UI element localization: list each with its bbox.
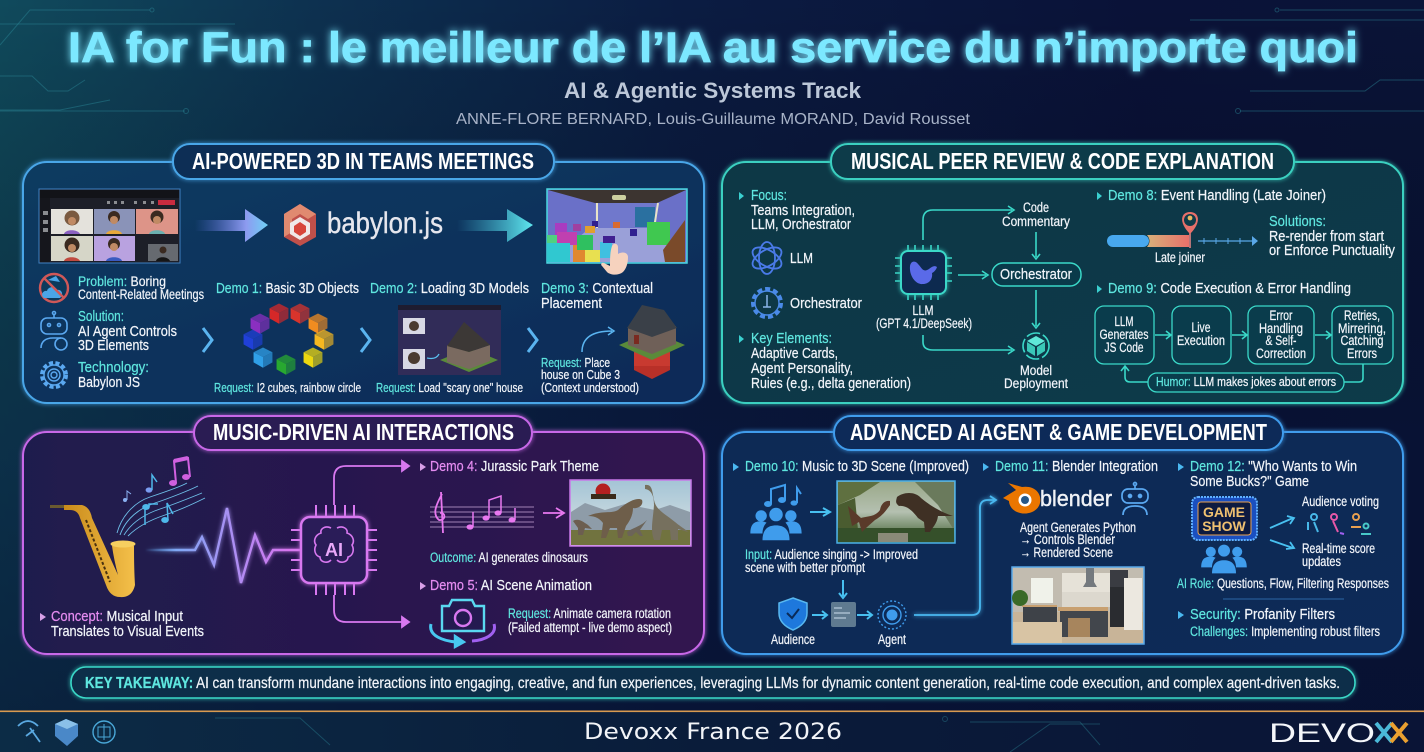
demo 5 request: Request: Animate camera rotation: [508, 606, 671, 621]
flow box: error handling: & Self-: [1266, 333, 1296, 348]
orchestrator pill: [992, 263, 1081, 286]
panel: AI-powered 3D in Teams meetings: [23, 144, 704, 403]
subtitle: track: AI & Agentic Systems Track: [564, 78, 862, 103]
solutions: Re-render from start: [1269, 229, 1384, 245]
Devoxx logo: DEVO: [1269, 718, 1375, 748]
flow box: LLM generates: [1095, 306, 1154, 364]
icon: pointing hand: [601, 244, 628, 275]
code commentary: Commentary: [1002, 214, 1070, 229]
jurassic park image: [570, 480, 691, 546]
orchestrator pill: Orchestrator: [1000, 267, 1072, 283]
flow box: error handling: Correction: [1256, 346, 1306, 361]
focus text: Focus:: [751, 188, 787, 204]
problem text: Content-Related Meetings: [78, 286, 204, 302]
music notes: [117, 458, 205, 536]
focus text: Teams Integration,: [751, 203, 855, 219]
flow box: error handling: Handling: [1259, 321, 1303, 336]
heading pill: MUSIC-DRIVEN AI INTERACTIONS: [213, 419, 514, 445]
demo 1 request: Request: I2 cubes, rainbow circle: [214, 380, 361, 395]
flow box: retries: Mirrering,: [1338, 321, 1386, 336]
demo 2 request: Request: Load "scary one" house: [376, 380, 523, 395]
icon: rotating camera: [431, 600, 494, 647]
model deployment: Model: [1020, 363, 1052, 378]
security: Challenges: Implementing robust filters: [1190, 624, 1380, 639]
AI chip: [291, 505, 377, 595]
demo 3 request: house on Cube 3: [541, 367, 620, 382]
icon: robot: [1122, 482, 1148, 515]
key takeaway banner: [71, 667, 1355, 698]
timeline: late joiner: [1107, 212, 1258, 248]
demo 12 heading: [1178, 459, 1357, 490]
heading pill: [194, 416, 532, 450]
saxophone: [50, 505, 136, 597]
solution text: AI Agent Controls: [78, 324, 177, 340]
icon: agent: [878, 601, 906, 629]
game show sign: GAME: [1203, 504, 1245, 520]
panel: musical peer review: [722, 144, 1403, 403]
small arrows: [812, 611, 872, 619]
humor pill: [1148, 373, 1344, 392]
icon: singing audience: [750, 485, 802, 540]
icon: shield: [779, 598, 807, 630]
concept: Concept: Musical Input: [51, 609, 183, 625]
late joiner label: Late joiner: [1155, 250, 1205, 265]
security: [1178, 607, 1380, 639]
title: IA for Fun : le meilleur de l’IA au service du n’importe quoi: [68, 24, 1358, 72]
LLM chip: [895, 245, 952, 300]
demo 3 request: (Context understood): [541, 380, 639, 395]
AI chip: AI: [325, 540, 343, 560]
labels: Agent: [878, 632, 906, 647]
agent generates: → Controls Blender: [1020, 532, 1115, 547]
house on cube: [619, 305, 685, 379]
demo 3 heading: Demo 3: Contextual: [541, 281, 653, 297]
code commentary: Code: [1023, 200, 1049, 215]
solutions: Solutions:: [1269, 214, 1326, 230]
icon: model cube: [1023, 333, 1049, 359]
model loader screenshot: [398, 305, 501, 375]
arrows: [1270, 516, 1294, 549]
demo 5 request: (Failed attempt - live demo aspect): [508, 620, 672, 635]
demo 1 heading: Demo 1: Basic 3D Objects: [216, 281, 359, 297]
icon: no boring meetings: [40, 274, 68, 302]
dino forest image: [837, 481, 955, 543]
game show sign: [1192, 497, 1257, 540]
input text: scene with better prompt: [745, 560, 865, 575]
flow box: retries: Retries,: [1344, 308, 1380, 323]
icon: voters: [1308, 514, 1371, 534]
LLM caption: (GPT 4.1/DeepSeek): [876, 316, 972, 331]
rainbow cube ring: [244, 304, 333, 375]
speakers: ANNE-FLORE BERNARD, Louis-Guillaume MORAND, David Rousset: [456, 111, 971, 128]
flow box: retries: Catching: [1340, 333, 1384, 348]
LLM caption: LLM: [912, 303, 934, 318]
key elements text: Adaptive Cards,: [751, 346, 838, 362]
arrow to scene: [810, 508, 830, 516]
key elements text: Agent Personality,: [751, 361, 853, 377]
audience voting: Audience voting: [1302, 494, 1379, 509]
agent generates: → Rendered Scene: [1020, 545, 1113, 560]
heading pill: [173, 144, 554, 179]
flow box: live execution: [1172, 306, 1231, 364]
demo 8 heading: Demo 8: Event Handling (Late Joiner): [1108, 188, 1326, 204]
concept: Translates to Visual Events: [51, 624, 204, 640]
prompt chip: [831, 602, 856, 627]
concept: [40, 609, 204, 640]
flow box: LLM generates: Generates: [1100, 327, 1149, 342]
demo 5 heading: Demo 5: AI Scene Animation: [430, 578, 592, 594]
LLM caption: [876, 303, 972, 331]
babylon.js logo: [284, 204, 443, 246]
heading pill: ADVANCED AI AGENT & GAME DEVELOPMENT: [850, 419, 1267, 445]
arrow to babylon: [195, 209, 268, 242]
solutions: [1269, 214, 1396, 259]
music staff: [430, 492, 564, 533]
agent generates: [1020, 520, 1136, 560]
heading pill: [834, 416, 1283, 450]
icon: gear: [42, 363, 66, 387]
problem text: [78, 273, 204, 302]
footer icons: [18, 719, 115, 746]
input text: [745, 547, 918, 575]
panel: music-driven AI interactions: [23, 416, 704, 654]
flow box: retries: Errors: [1347, 346, 1377, 361]
flow box: LLM generates: JS Code: [1104, 340, 1144, 355]
flow box arrows: [1121, 331, 1363, 382]
heading pill: [831, 144, 1294, 179]
demo 2 heading: Demo 2: Loading 3D Models: [370, 281, 529, 297]
babylon.js logo: babylon.js: [327, 207, 443, 240]
curved arrow: [582, 327, 614, 352]
flow box: live execution: Execution: [1177, 333, 1225, 348]
arrow to 3D scene: [457, 209, 533, 242]
orchestrator label: Orchestrator: [790, 296, 862, 312]
solutions: or Enforce Punctuality: [1269, 243, 1396, 259]
3D room screenshot: [547, 189, 687, 263]
icon: orchestrator gear: [753, 289, 781, 317]
heading pill: MUSICAL PEER REVIEW & CODE EXPLANATION: [851, 148, 1274, 174]
real-time score: [1302, 541, 1375, 569]
key elements text: Key Elements:: [751, 331, 832, 347]
flow arrows: [923, 206, 1040, 354]
arrow down: [839, 580, 847, 598]
Devoxx logo: [1269, 718, 1407, 748]
outcome: Outcome: AI generates dinosaurs: [430, 550, 588, 565]
key elements text: [739, 331, 911, 392]
solution text: 3D Elements: [78, 338, 149, 354]
flow box: retries: [1332, 306, 1393, 364]
focus text: [739, 188, 855, 233]
icon: robot: [41, 312, 67, 350]
technology text: [78, 360, 149, 391]
arrows from chip: [334, 461, 409, 627]
demo 10 heading: Demo 10: Music to 3D Scene (Improved): [745, 459, 969, 475]
path to blender: [914, 496, 996, 615]
panel: advanced AI agent & game development: [722, 416, 1403, 654]
demo 4 heading: Demo 4: Jurassic Park Theme: [430, 459, 599, 475]
solution text: Solution:: [78, 309, 124, 325]
kitchen image: [1012, 567, 1144, 644]
humor pill: Humor: LLM makes jokes about errors: [1156, 374, 1336, 389]
demo 3 request: Request: Place: [541, 355, 610, 370]
problem text: Problem: Boring: [78, 273, 166, 289]
solution text: [78, 309, 177, 354]
technology text: Technology:: [78, 360, 149, 376]
demo 5 request: [508, 606, 672, 635]
heading pill: AI-POWERED 3D IN TEAMS MEETINGS: [192, 148, 534, 174]
demo 9 heading: Demo 9: Code Execution & Error Handling: [1108, 281, 1351, 297]
demo 3 heading: [541, 281, 653, 312]
demo 12 heading: Some Bucks?" Game: [1190, 474, 1309, 490]
key elements text: Ruies (e.g., delta generation): [751, 376, 911, 392]
chevrons: [203, 328, 537, 352]
flow box: error handling: Error: [1270, 308, 1293, 323]
demo 11 heading: Demo 11: Blender Integration: [995, 459, 1158, 475]
agent generates: Agent Generates Python: [1020, 520, 1136, 535]
labels: Audience: [771, 632, 815, 647]
model deployment: [1004, 363, 1068, 391]
focus text: LLM, Orchestrator: [751, 217, 851, 233]
flow box: error handling: [1248, 306, 1314, 364]
labels: [771, 632, 906, 647]
demo 3 heading: Placement: [541, 296, 602, 312]
technology text: Babylon JS: [78, 375, 140, 391]
waveform: [145, 508, 300, 583]
blender logo: blender: [1040, 486, 1112, 511]
teams meeting screenshot: [39, 189, 180, 263]
demo 3 request: [541, 355, 639, 395]
conference name: Devoxx France 2026: [584, 720, 842, 745]
icon: LLM knot: [749, 242, 785, 274]
real-time score: Real-time score: [1302, 541, 1375, 556]
model deployment: Deployment: [1004, 376, 1068, 391]
flow box: LLM generates: LLM: [1114, 314, 1134, 329]
input text: Input: Audience singing -> Improved: [745, 547, 918, 562]
code commentary: [1002, 200, 1070, 229]
real-time score: updates: [1302, 554, 1341, 569]
game show sign: SHOW: [1202, 518, 1247, 534]
LLM label: LLM: [790, 251, 813, 267]
blender logo: [1003, 483, 1112, 514]
security: Security: Profanity Filters: [1190, 607, 1335, 623]
flow box: live execution: Live: [1192, 320, 1210, 335]
icon: people: [1201, 545, 1247, 573]
demo 12 heading: Demo 12: "Who Wants to Win: [1190, 459, 1357, 475]
footer: [0, 710, 1424, 752]
